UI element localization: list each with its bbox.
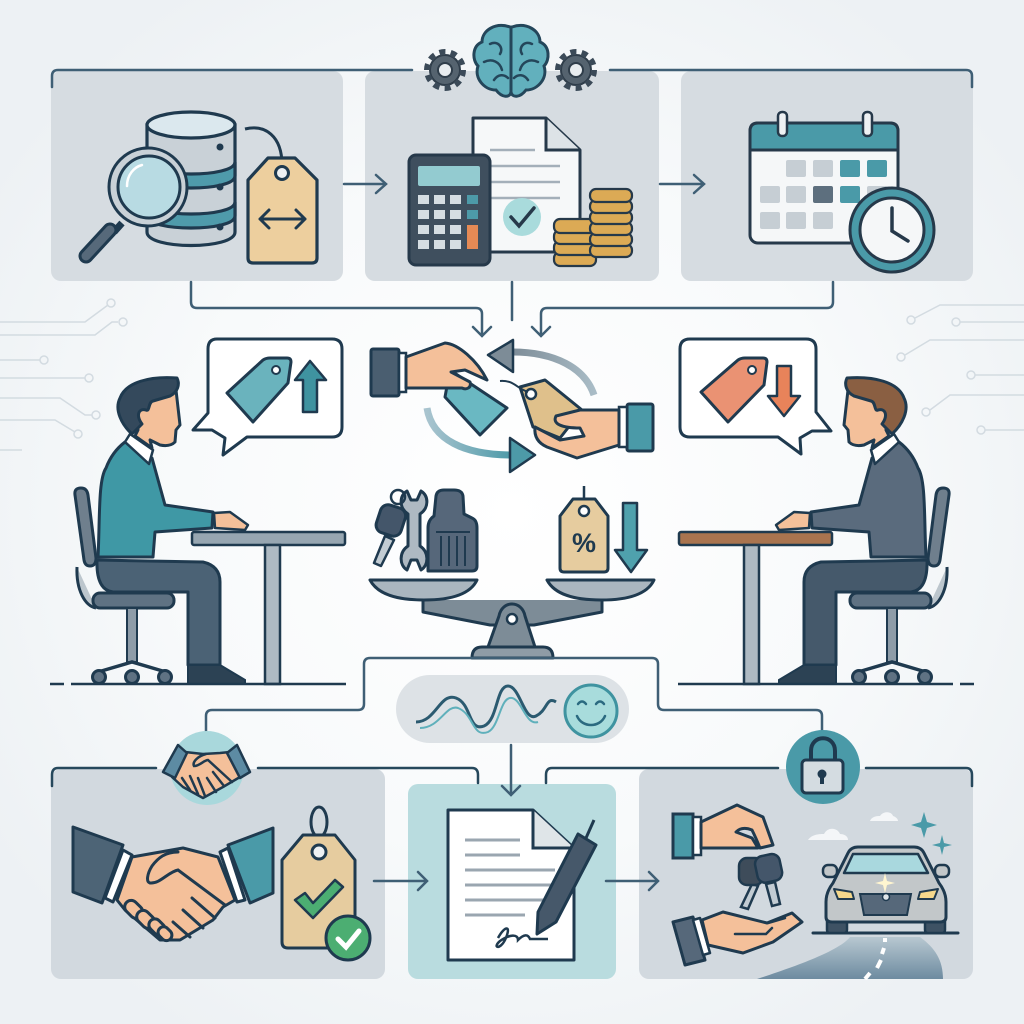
connectors from scale to outcomes [206,658,822,732]
icon: left gear [427,52,463,88]
icon: document [448,810,574,960]
icon: up arrow [295,361,326,412]
pill: sentiment wave and smiley [396,675,629,743]
decorative circuit traces left [0,299,127,450]
chair [850,488,949,684]
icon: scale pans and beam [370,580,654,658]
icon: beige tag [500,380,582,438]
icon: magnifier [86,148,187,256]
panel: handshake agreement [51,769,385,979]
arrow: cost to calendar [660,175,704,193]
figure: right negotiator at desk [776,378,949,684]
icon: calendar [750,112,898,243]
legs [97,560,220,665]
figure: left negotiator at desk [75,378,248,684]
icon: lock badge [786,730,860,804]
icon: right hand with cuff [535,404,653,458]
icon: orange tag [701,358,767,422]
floor right [678,683,974,685]
icon: right gear [558,52,594,88]
shoe [779,665,836,684]
icon: tag with green check [282,807,370,960]
panel: key handover [639,769,973,979]
panel: calendar timing [681,71,973,281]
icon: down arrow [615,503,647,572]
hand [776,512,810,530]
icon: gears and brain [427,25,594,96]
icon: calculator document and coins [409,118,632,266]
icon: lower open hand [673,912,802,965]
hand [214,512,248,530]
head [844,390,889,448]
callout: price down [680,339,831,454]
collar [871,434,899,464]
top connector lines [52,70,972,87]
arrow: agreement to contract [374,872,427,890]
icon: balance scale with items [370,486,654,658]
icon: sparkles and clouds [808,812,952,855]
arrow: pill to contract [502,745,520,795]
icon: calculator [409,155,490,265]
shoe [188,665,245,684]
icon: down arrow [768,366,800,416]
chair [75,488,174,684]
callout: price up [193,339,342,455]
icon: small handshake badge [163,731,250,805]
head [135,390,180,448]
bottom connector lines [52,768,972,786]
icon: large handshake with cuffs [73,827,273,943]
icon: database with magnifier and price tag [86,112,317,263]
arrow: contract to keys [606,872,658,890]
icon: wrench [401,491,427,570]
icon: teal tag in hand [445,370,507,435]
icon: price tag [245,128,317,263]
icon: hands exchanging tags [371,340,653,472]
icon: calendar and clock [750,112,934,272]
icon: contract with pen [448,810,596,960]
torso [811,442,926,557]
icon: swap arrows [427,340,594,472]
icon: car keys [739,853,784,909]
torso [98,442,213,557]
hair [846,378,906,434]
icon: upper hand [673,805,773,858]
connector lines into negotiation [191,282,833,336]
icon: clock [850,188,934,272]
icon: floor mat [428,490,477,571]
collar [125,434,153,464]
icon: percent tag: % [572,528,596,558]
icon: teal tag [227,358,291,422]
icon: left desk [192,532,345,684]
icon: hands with keys [673,805,802,965]
panel: data research [51,71,343,281]
panel: cost calculation [365,71,659,281]
legs [804,560,927,665]
icon: car key [374,490,408,566]
floor left [50,683,346,685]
icon: wave [416,686,556,733]
icon: document [473,118,580,252]
icon: database stack [147,112,235,246]
icon: car on road [757,847,958,979]
arrow: research to cost [344,175,386,193]
icon: smiley [565,685,617,737]
icon: right desk [679,532,832,684]
hair [118,378,178,434]
icon: brain [474,25,548,96]
icon: percent tag [560,486,608,572]
icon: coin stacks [554,189,632,266]
decorative circuit traces right [897,305,1024,434]
icon: pen [537,820,596,934]
icon: left hand with cuff [371,343,487,396]
panel: signed contract [408,784,616,979]
